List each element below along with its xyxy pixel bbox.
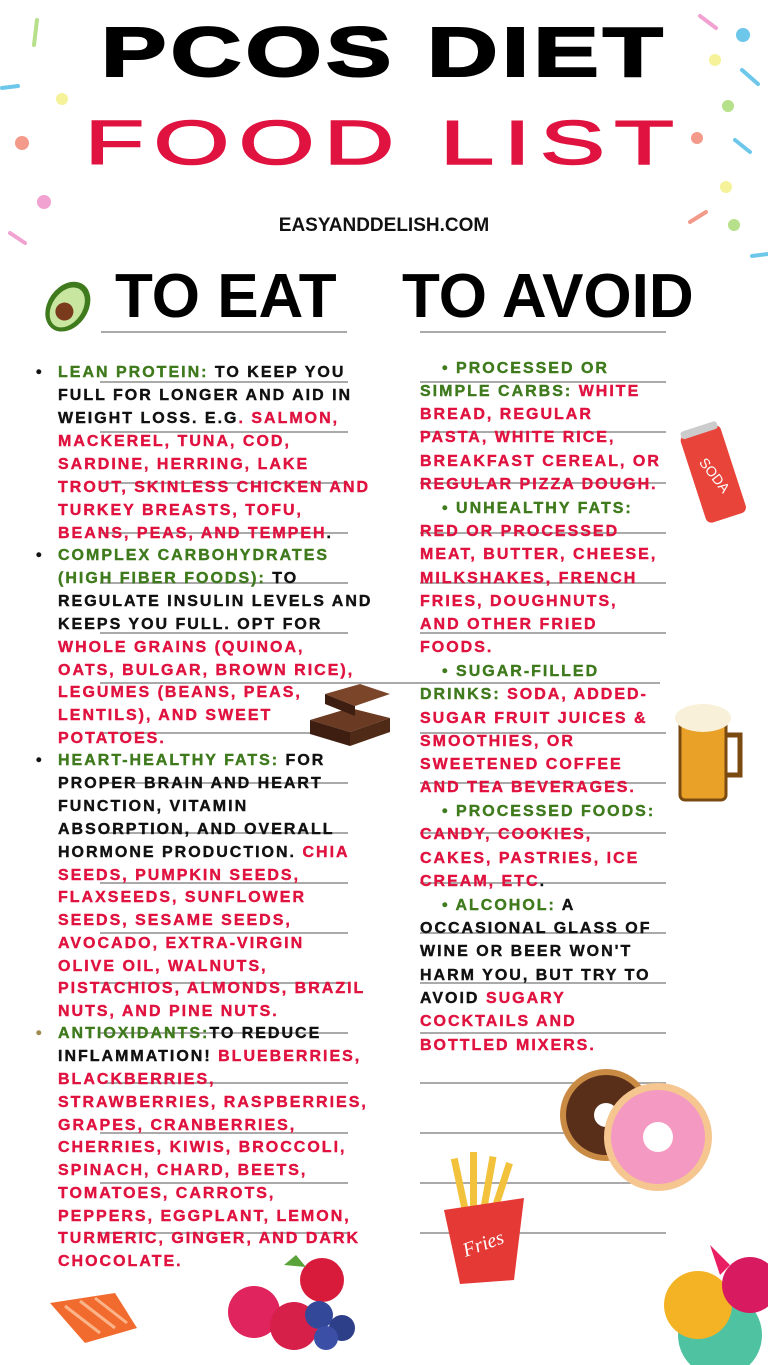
- panel: to eat list: LENTILS), AND SWEET: [58, 707, 272, 724]
- panel: to eat list: OLIVE OIL, WALNUTS,: [58, 958, 268, 975]
- panel: to eat list: PISTACHIOS, ALMONDS, BRAZIL: [58, 980, 365, 997]
- panel: to avoid list: CREAM, ETC.: [420, 873, 546, 890]
- panel: to eat list: MACKEREL, TUNA, COD,: [58, 433, 291, 450]
- panel: to eat list: •: [36, 1025, 44, 1042]
- panel: to eat list: ANTIOXIDANTS:TO REDUCE: [58, 1025, 321, 1042]
- panel: to eat list: TURMERIC, GINGER, AND DARK: [58, 1230, 360, 1247]
- panel: to eat list: BEANS, PEAS, AND TEMPEH.: [58, 525, 333, 542]
- icon: candy: [664, 1245, 768, 1365]
- icon: fries: Fries: [459, 1226, 507, 1262]
- panel: to eat list: KEEPS YOU FULL. OPT FOR: [58, 616, 322, 633]
- panel: to avoid list: RED OR PROCESSED: [420, 523, 619, 540]
- panel: to eat list: HORMONE PRODUCTION. CHIA: [58, 844, 350, 861]
- panel: to avoid list: • SUGAR-FILLED: [442, 663, 599, 680]
- panel: to avoid list: SIMPLE CARBS: WHITE: [420, 383, 640, 400]
- panel: to avoid list: AND OTHER FRIED: [420, 616, 598, 633]
- panel: to eat list: LEAN PROTEIN: TO KEEP YOU: [58, 364, 345, 381]
- panel: to eat list: WHOLE GRAINS (QUINOA,: [58, 639, 304, 656]
- panel: to avoid list: PASTA, WHITE RICE,: [420, 429, 615, 446]
- heading: to avoid: TO AVOID: [402, 262, 694, 331]
- panel: to eat list: [36, 364, 372, 1270]
- panel: to eat list: OATS, BULGAR, BROWN RICE),: [58, 662, 354, 679]
- panel: to eat list: POTATOES.: [58, 730, 166, 747]
- panel: to avoid list: • UNHEALTHY FATS:: [442, 500, 633, 517]
- panel: to avoid list: • PROCESSED OR: [442, 360, 609, 377]
- panel: to avoid list: CAKES, PASTRIES, ICE: [420, 850, 639, 867]
- icon: beer mug: [675, 704, 742, 802]
- panel: to eat list: CHOCOLATE.: [58, 1253, 183, 1270]
- panel: to avoid list: OCCASIONAL GLASS OF: [420, 920, 652, 937]
- panel: to avoid list: BREAKFAST CEREAL, OR: [420, 453, 661, 470]
- panel: to avoid list: AVOID SUGARY: [420, 990, 566, 1007]
- panel: to eat list: TOMATOES, CARROTS,: [58, 1185, 275, 1202]
- panel: to avoid list: WINE OR BEER WON'T: [420, 943, 632, 960]
- panel: to avoid list: AND TEA BEVERAGES.: [420, 779, 636, 796]
- panel: to eat list: SEEDS, PUMPKIN SEEDS,: [58, 867, 300, 884]
- panel: to avoid list: • PROCESSED FOODS:: [442, 803, 655, 820]
- panel: to eat list: PEPPERS, EGGPLANT, LEMON,: [58, 1208, 351, 1225]
- icon: berries: [228, 1255, 355, 1350]
- panel: to eat list: HEART-HEALTHY FATS: FOR: [58, 752, 325, 769]
- panel: to eat list: •: [36, 752, 44, 769]
- confetti decoration: [0, 14, 768, 258]
- heading: to eat: TO EAT: [115, 262, 337, 331]
- panel: to eat list: BLACKBERRIES,: [58, 1071, 216, 1088]
- panel: to eat list: SARDINE, HERRING, LAKE: [58, 456, 309, 473]
- icon: chocolate: [310, 684, 390, 746]
- panel: to eat list: COMPLEX CARBOHYDRATES: [58, 547, 329, 564]
- panel: to eat list: AVOCADO, EXTRA-VIRGIN: [58, 935, 304, 952]
- panel: to eat list: TROUT, SKINLESS CHICKEN AND: [58, 479, 370, 496]
- panel: to eat list: PROPER BRAIN AND HEART: [58, 775, 323, 792]
- panel: to avoid list: SMOOTHIES, OR: [420, 733, 575, 750]
- panel: to avoid list: REGULAR PIZZA DOUGH.: [420, 476, 658, 493]
- icon: salmon: [50, 1293, 137, 1343]
- panel: to avoid list: [420, 360, 661, 1054]
- subtitle: food list: FOOD LIST: [85, 109, 683, 178]
- panel: to eat list: FLAXSEEDS, SUNFLOWER: [58, 889, 306, 906]
- panel: to avoid list: SUGAR FRUIT JUICES &: [420, 710, 648, 727]
- panel: to eat list: •: [36, 547, 44, 564]
- panel: to eat list: NUTS, AND PINE NUTS.: [58, 1003, 279, 1020]
- panel: to avoid list: SWEETENED COFFEE: [420, 756, 623, 773]
- panel: to eat list: (HIGH FIBER FOODS): TO: [58, 570, 298, 587]
- panel: to avoid list: COCKTAILS AND: [420, 1013, 577, 1030]
- panel: to avoid list: • ALCOHOL: A: [442, 897, 575, 914]
- panel: to avoid list: DRINKS: SODA, ADDED-: [420, 686, 648, 703]
- panel: to eat list: LEGUMES (BEANS, PEAS,: [58, 684, 302, 701]
- icon: fries: [444, 1152, 524, 1284]
- panel: to avoid list: FRIES, DOUGHNUTS,: [420, 593, 618, 610]
- panel: to eat list: SEEDS, SESAME SEEDS,: [58, 912, 292, 929]
- panel: to avoid list: BREAD, REGULAR: [420, 406, 593, 423]
- panel: to eat list: CHERRIES, KIWIS, BROCCOLI,: [58, 1139, 346, 1156]
- panel: to avoid list: MILKSHAKES, FRENCH: [420, 570, 637, 587]
- panel: to eat list: FULL FOR LONGER AND AID IN: [58, 387, 352, 404]
- panel: to eat list: INFLAMMATION! BLUEBERRIES,: [58, 1048, 361, 1065]
- icon: soda can: [680, 421, 746, 523]
- panel: to eat list: TURKEY BREASTS, TOFU,: [58, 502, 303, 519]
- icon: avocado: [45, 282, 90, 332]
- icon: donuts: [560, 1069, 712, 1191]
- icon: soda can: SODA: [696, 455, 734, 496]
- panel: to avoid list: MEAT, BUTTER, CHEESE,: [420, 546, 657, 563]
- panel: to avoid list: BOTTLED MIXERS.: [420, 1037, 596, 1054]
- panel: to eat list: •: [36, 364, 44, 381]
- panel: to eat list: STRAWBERRIES, RASPBERRIES,: [58, 1094, 368, 1111]
- panel: to eat list: ABSORPTION, AND OVERALL: [58, 821, 335, 838]
- panel: to eat list: SPINACH, CHARD, BEETS,: [58, 1162, 307, 1179]
- ruled lines: [100, 381, 766, 1350]
- panel: to avoid list: HARM YOU, BUT TRY TO: [420, 967, 651, 984]
- website: EASYANDDELISH.COM: [279, 215, 489, 236]
- title: PCOS DIET: [101, 13, 667, 91]
- panel: to eat list: GRAPES, CRANBERRIES,: [58, 1117, 296, 1134]
- panel: to eat list: WEIGHT LOSS. E.G. SALMON,: [58, 410, 339, 427]
- panel: to avoid list: FOODS.: [420, 639, 493, 656]
- panel: to eat list: REGULATE INSULIN LEVELS AND: [58, 593, 372, 610]
- panel: to eat list: FUNCTION, VITAMIN: [58, 798, 248, 815]
- panel: to avoid list: CANDY, COOKIES,: [420, 826, 592, 843]
